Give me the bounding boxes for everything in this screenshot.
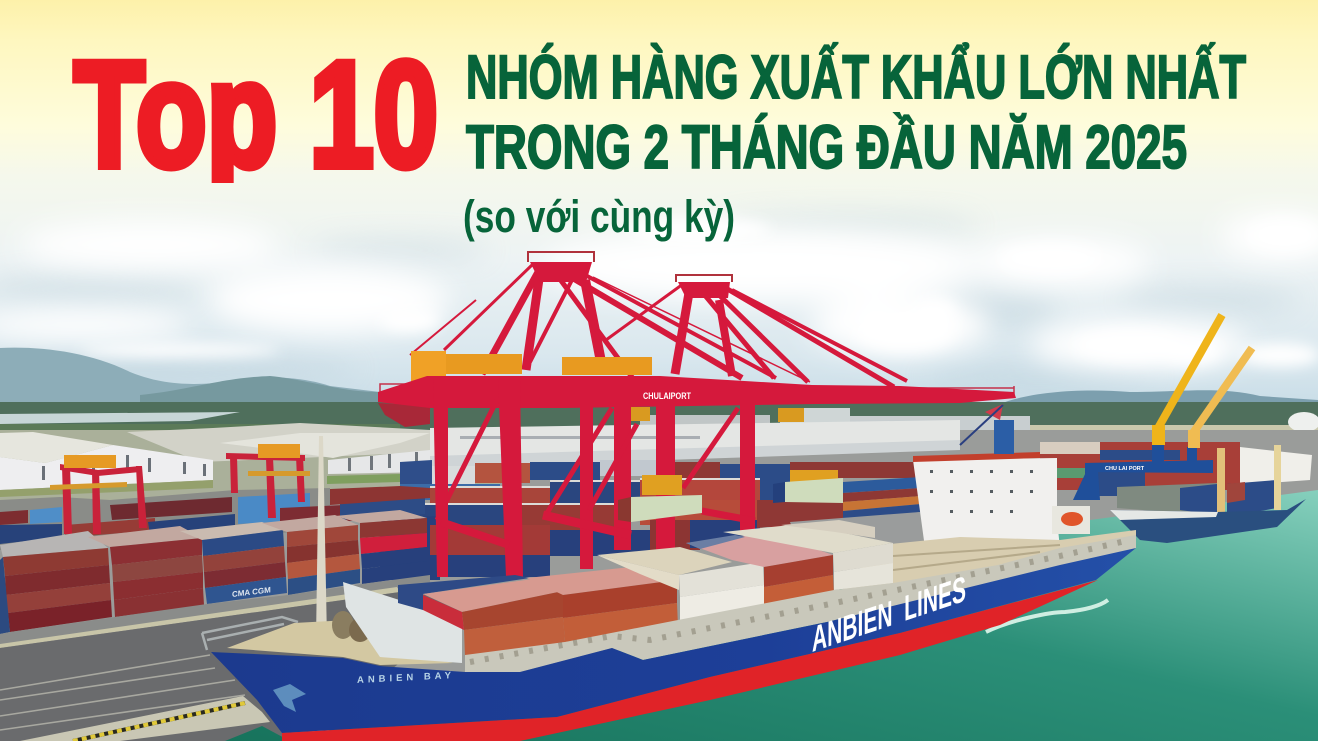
- container yard background: [380, 460, 921, 580]
- subtitle: (so với cùng kỳ): [463, 191, 735, 242]
- title: Top 10: Top 10: [74, 30, 438, 198]
- breakwater: [343, 582, 462, 663]
- far blue containers: [398, 575, 530, 610]
- bow logo: [273, 684, 306, 712]
- left yard containers back row: [0, 460, 432, 550]
- ship name ANBIEN LINES: ANBIEN LINES: [812, 568, 966, 660]
- lifeboat: [1052, 506, 1090, 534]
- small ship: [1110, 425, 1306, 543]
- second jib: [1193, 348, 1252, 433]
- deck containers aft: [834, 530, 1136, 600]
- container label CMA CGM: CMA CGM: [232, 585, 271, 599]
- container block A: [423, 579, 565, 657]
- ship mast: [316, 436, 327, 640]
- white container stack: [597, 547, 764, 620]
- crane 1 A-frame: [410, 252, 810, 384]
- cabins: [625, 407, 650, 421]
- hull red: [282, 580, 1098, 741]
- trolley truss below boom: [378, 403, 430, 427]
- wake of ship: [986, 600, 1108, 632]
- side structure: [465, 535, 1136, 672]
- white right containers: [723, 520, 893, 590]
- hull blue: [211, 548, 1136, 733]
- legs: [433, 378, 755, 577]
- diagonals: [437, 398, 755, 545]
- sea: [225, 490, 1318, 741]
- winches: [332, 611, 392, 644]
- superstructure: [913, 452, 1060, 548]
- gantry label: CHU LAI PORT: [1105, 466, 1145, 472]
- mountains: [0, 348, 1318, 412]
- background sky: [0, 0, 1318, 420]
- crane 2 A-frame: [606, 275, 907, 387]
- clouds: [0, 212, 1318, 386]
- machinery houses: [411, 351, 446, 386]
- forecastle deck: [227, 620, 453, 665]
- container block B: [527, 567, 678, 642]
- side structure details: [470, 540, 1130, 662]
- yellow jib: [1157, 315, 1222, 430]
- ship name ANBIEN BAY: ANBIEN BAY: [357, 670, 452, 686]
- cargo ship: [202, 404, 1136, 741]
- walkway railings: [380, 384, 1014, 396]
- red container stack: [686, 533, 834, 607]
- spreader and hanging container 1: [618, 475, 702, 522]
- far shoreline: [0, 402, 1318, 450]
- boom deck: [378, 376, 1016, 408]
- crane label: CHULAIPORT: [643, 391, 691, 402]
- spreader and hanging container 2: [773, 470, 843, 503]
- main gantry crane: [378, 252, 1016, 577]
- warehouses: [0, 420, 960, 500]
- RTG crane right: [226, 444, 310, 518]
- road and quay: [0, 575, 480, 741]
- RTG crane left: [50, 455, 147, 534]
- front container stacks: [0, 510, 427, 634]
- bow railing: [202, 617, 298, 650]
- far right ship and gantry: [1040, 442, 1312, 500]
- ground: [0, 430, 1318, 741]
- funnel flags: [960, 404, 1014, 454]
